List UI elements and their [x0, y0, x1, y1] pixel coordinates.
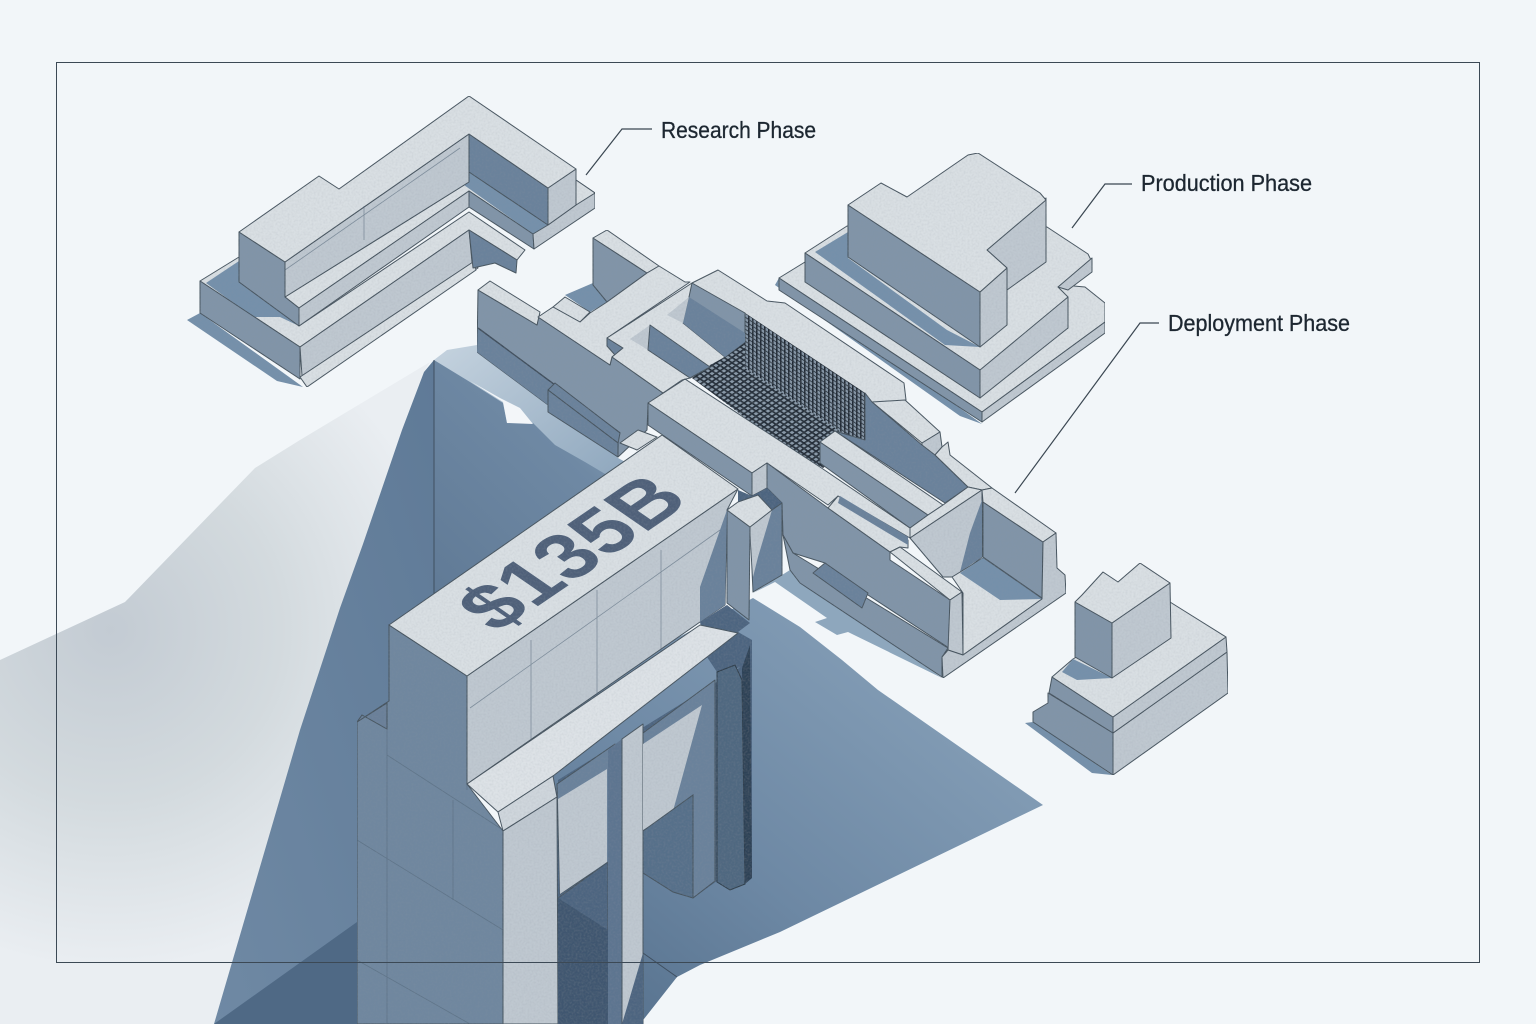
large shadow at right of tower	[520, 598, 1043, 1024]
pale floor shadow under left wing	[434, 345, 640, 510]
label: deployment phase: Deployment Phase	[1168, 310, 1350, 336]
label: production phase	[1072, 170, 1312, 228]
title figure on top face: $135B	[438, 461, 705, 644]
pale shadow under long wall	[753, 570, 942, 678]
inner shadow wedge	[469, 230, 517, 273]
end room	[942, 488, 1066, 678]
lower level	[1033, 693, 1113, 775]
left window	[557, 744, 615, 1024]
back strip and far pit wall	[835, 393, 992, 503]
plinth	[779, 262, 1105, 412]
rear small wall	[553, 230, 659, 322]
front column	[503, 797, 558, 1024]
main tower	[357, 435, 752, 1024]
light wash shadow at left	[0, 362, 430, 1024]
central slab with back wing	[607, 270, 906, 410]
left connector top	[538, 266, 690, 365]
label: production phase: Production Phase	[1141, 170, 1312, 196]
dense rod grid	[692, 313, 865, 468]
pit two	[630, 325, 710, 378]
pillar	[727, 488, 782, 620]
block: research phase	[187, 96, 595, 387]
block: small cube	[1025, 563, 1228, 775]
upper step	[285, 182, 548, 308]
block: deployment wing and bridge	[477, 230, 1066, 678]
block: production phase	[775, 153, 1105, 424]
pit one	[667, 283, 745, 357]
middle column	[608, 724, 643, 1024]
lit upper face	[467, 489, 738, 784]
cast shadows on the ground	[0, 345, 1043, 1024]
lower shaded interior	[558, 660, 752, 1024]
left dark face	[357, 625, 503, 1024]
long lower wall	[767, 463, 963, 677]
well shadow behind tower	[389, 360, 662, 625]
dark shadow wedge beside tower	[214, 360, 434, 1024]
floor shadow	[1025, 722, 1112, 775]
label: research phase	[586, 117, 816, 175]
left wall	[477, 281, 663, 457]
rear piers	[717, 645, 752, 890]
upper level	[1075, 602, 1112, 678]
base level	[200, 212, 525, 347]
long bar in right pit	[820, 431, 982, 538]
ledge	[467, 605, 752, 831]
floor shadow	[775, 278, 982, 424]
label: research phase: Research Phase	[661, 117, 816, 143]
top face	[389, 435, 738, 676]
corner lit block	[910, 490, 982, 577]
right window	[643, 680, 715, 898]
label: deployment phase	[1015, 310, 1350, 493]
small step block	[620, 430, 657, 450]
ledge	[533, 180, 595, 249]
upper mass	[848, 205, 980, 347]
floor shadow	[187, 313, 303, 387]
tall mass	[239, 232, 299, 326]
second level	[805, 226, 1092, 370]
main beam top	[648, 379, 910, 538]
